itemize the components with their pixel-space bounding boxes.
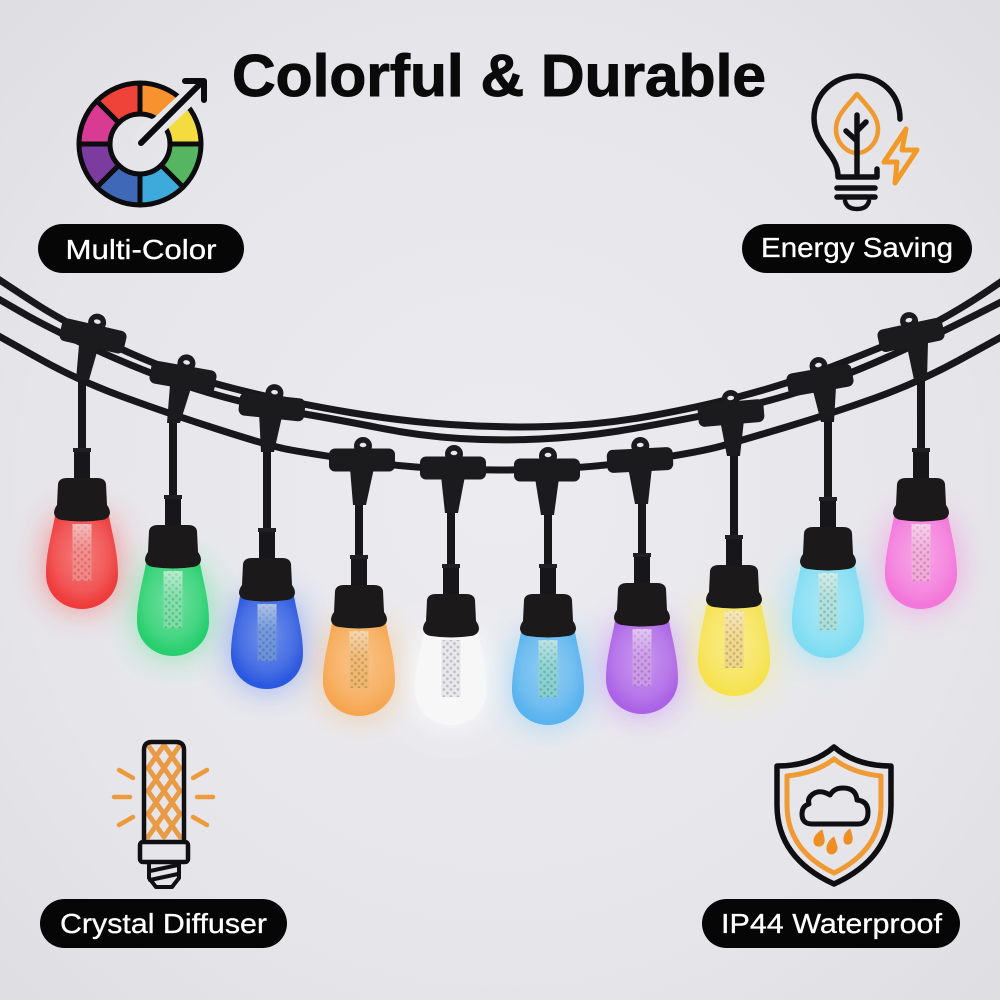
pill: Crystal Diffuser — [40, 899, 287, 948]
bulb 6: sky blue — [512, 509, 584, 725]
bulb 5: white — [415, 509, 487, 725]
bulb 1: red — [46, 378, 118, 609]
icon: energy saving bulb — [814, 76, 917, 209]
pill: Multi-Color — [38, 224, 244, 273]
icon: color wheel with arrow — [79, 81, 204, 205]
cable connectors — [58, 306, 946, 515]
pill: Multi-Color: Multi-Color — [66, 234, 216, 265]
pill: Energy Saving — [742, 224, 972, 273]
title: Colorful & Durable — [232, 43, 766, 109]
bulb 4: orange — [323, 500, 395, 716]
light string cables — [0, 277, 1000, 470]
bulb 9: cyan — [792, 412, 864, 658]
icon: IP44 waterproof shield — [777, 747, 891, 884]
bulb 3: blue — [231, 448, 303, 689]
bulb 2: green — [137, 420, 209, 656]
icon: crystal diffuser bulb — [114, 742, 213, 887]
pill: Energy Saving: Energy Saving — [761, 232, 953, 263]
pill: Crystal Diffuser: Crystal Diffuser — [60, 908, 267, 939]
bulb 8: yellow — [698, 450, 770, 696]
bulb 7: purple — [606, 498, 678, 714]
bulb 10: pink — [885, 373, 957, 609]
pill: IP44 Waterproof: IP44 Waterproof — [721, 908, 942, 939]
pill: IP44 Waterproof — [702, 899, 960, 948]
